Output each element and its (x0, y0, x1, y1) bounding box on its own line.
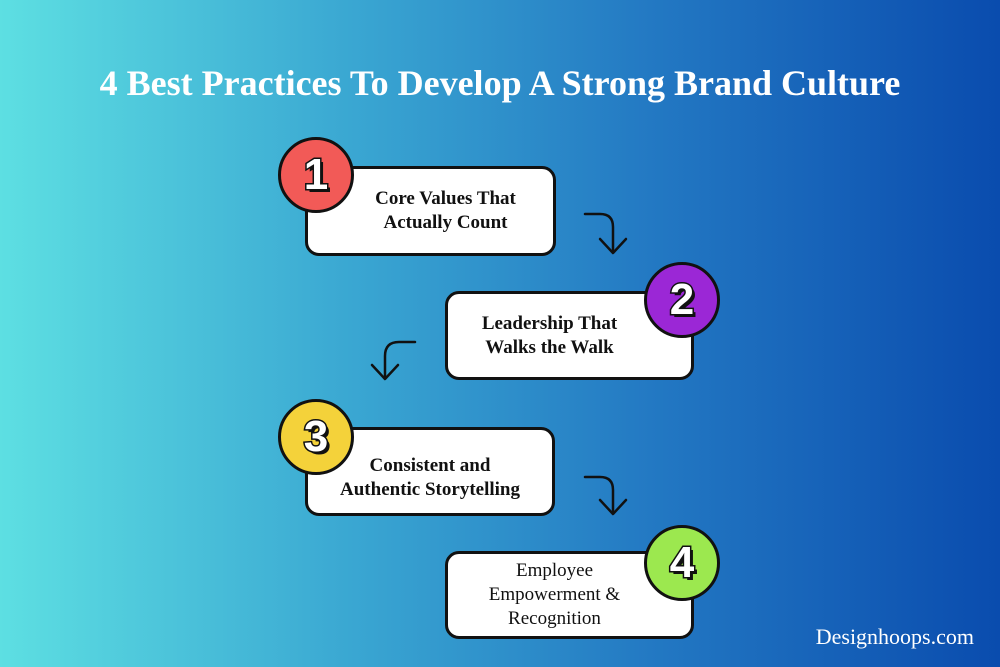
badge 2 (644, 262, 720, 338)
footer: Designhoops.com (816, 624, 974, 649)
arrow 3 (585, 477, 626, 514)
step 4 box: Empowerment & (489, 584, 620, 605)
badge 2: 2 (670, 275, 694, 324)
title: 4 Best Practices To Develop A Strong Brand Culture (100, 63, 900, 103)
arrow 2 (372, 342, 415, 379)
step 1 box: Core Values That (375, 188, 516, 209)
badge 4: 4 (670, 538, 694, 587)
step 4 box: Employee (516, 560, 593, 581)
step 1 box (305, 166, 556, 256)
badge 3: 3 (304, 412, 328, 461)
step 3 box: Consistent and (370, 454, 490, 476)
step 4 box: Recognition (508, 608, 601, 629)
step 4 box (445, 551, 694, 639)
step 2 box: Leadership That (482, 312, 617, 334)
step 2 box (445, 291, 694, 380)
arrow 1 (585, 214, 626, 253)
step 1 box: Actually Count (383, 212, 508, 233)
step 2 box: Walks the Walk (485, 336, 614, 358)
badge 3 (278, 399, 354, 475)
step 3 box (305, 427, 555, 516)
badge 1: 1 (304, 150, 328, 199)
badge 1 (278, 137, 354, 213)
step 3 box: Authentic Storytelling (340, 478, 520, 500)
badge 4 (644, 525, 720, 601)
